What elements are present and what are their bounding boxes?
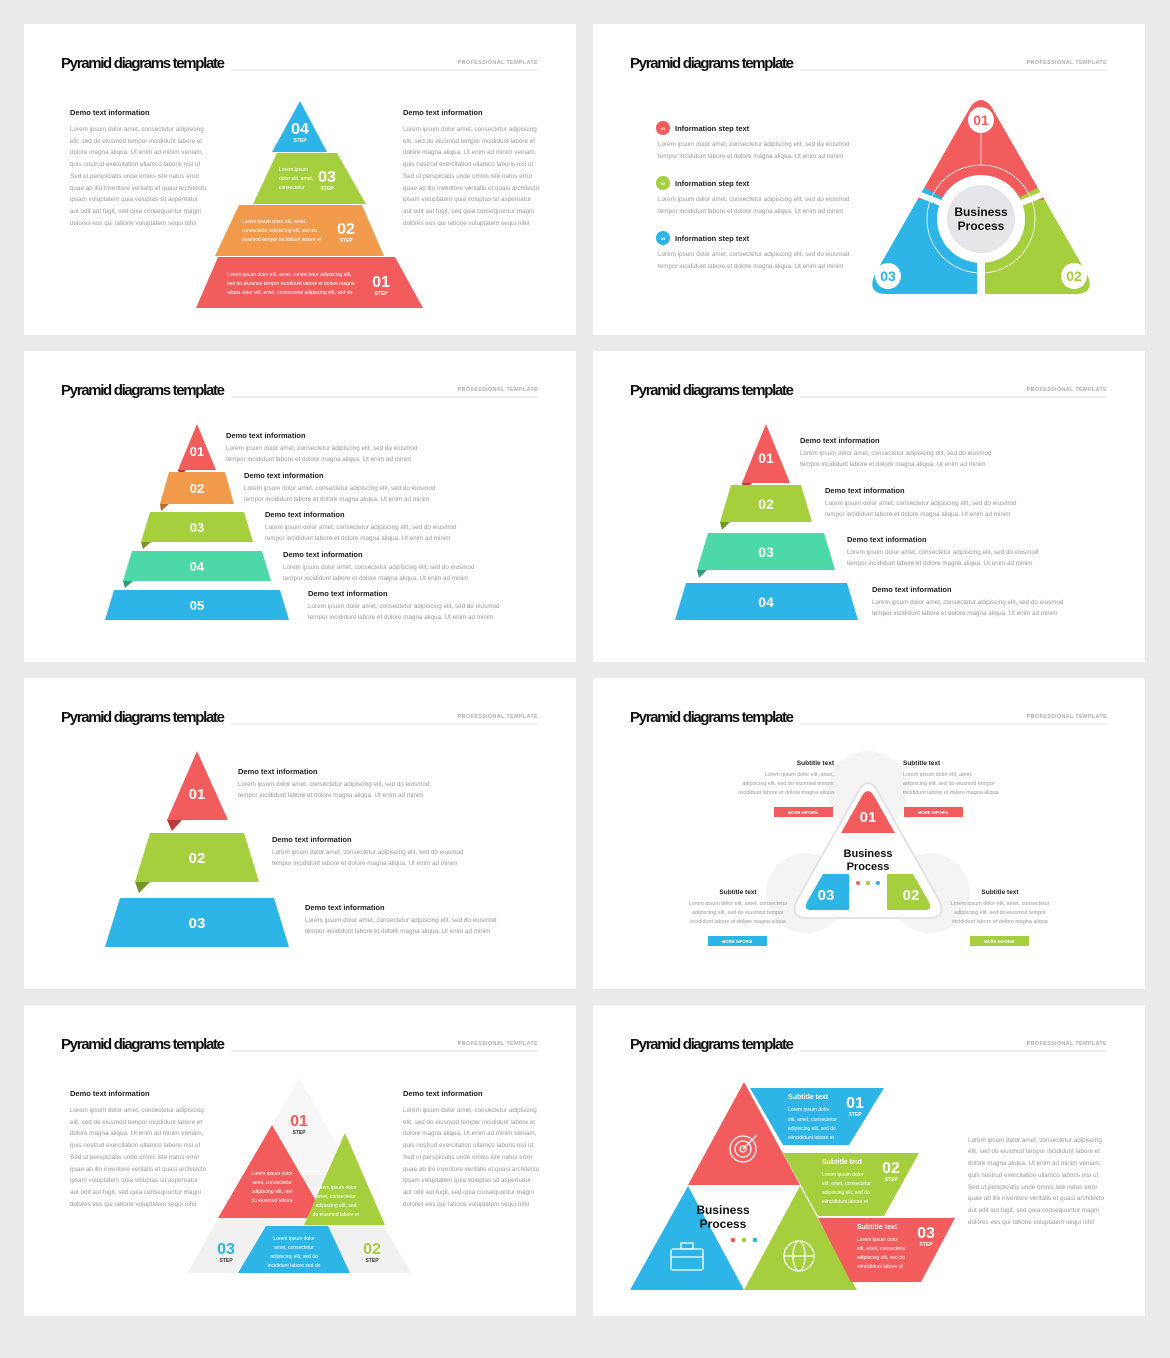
right text block: aut odit aut fugit, sed quia consequuntur magni bbox=[403, 1189, 534, 1196]
right text block: aut odit aut fugit, sed quia consequuntur magni bbox=[403, 208, 534, 215]
diagram: eiincididunt labore et bbox=[822, 1199, 868, 1205]
triangle diagram: amet, consectetur bbox=[252, 1180, 292, 1186]
header: Pyramid diagrams template bbox=[630, 382, 794, 399]
left text block: quis nostrud exercitation ullamco laboris nisi ut bbox=[70, 161, 200, 168]
callout bottom-left: Subtitle text bbox=[719, 889, 757, 896]
callout bottom-left bbox=[689, 889, 788, 946]
triangle diagram bbox=[187, 1078, 411, 1273]
right text block: dolore magna aliqua. Ut enim ad minim veniam, bbox=[403, 1130, 537, 1137]
tier labels bbox=[800, 436, 1064, 617]
slide 3: five tier pyramid bbox=[24, 351, 576, 662]
tier labels: Lorem ipsum dolor amet, consectetur adipiscing elit, sed do eiusmod bbox=[272, 849, 464, 856]
left text block: Sed ut perspiciatis unde omnis iste natus error bbox=[70, 173, 200, 180]
pyramid tiers: 01 bbox=[758, 450, 774, 466]
left text block: Demo text information bbox=[70, 108, 150, 117]
step list: Information step text bbox=[675, 234, 750, 243]
diagram: elit, amet, consectetur bbox=[822, 1181, 871, 1187]
pyramid: Lorem ipsum dolor elit, amet, consectetur adipiscing elit, bbox=[227, 272, 352, 278]
callout top-right: MORE INFORM bbox=[918, 810, 949, 815]
tier labels: Lorem ipsum dolor amet, consectetur adipiscing elit, sed do eiusmod bbox=[265, 524, 457, 531]
triangle diagram: 01 bbox=[290, 1113, 308, 1130]
triangle diagram: adipiscing elit, sed do bbox=[270, 1254, 318, 1260]
diagram bbox=[630, 1082, 955, 1290]
callout bottom-left: MORE INFORM bbox=[722, 939, 753, 944]
header: Pyramid diagrams template bbox=[630, 1036, 794, 1053]
callout top-left: adipiscing elit, sed do eiusmod tempor bbox=[742, 781, 834, 787]
pyramid: 04 bbox=[291, 121, 309, 138]
callout top-left: Lorem ipsum dolor elit, amet, bbox=[764, 772, 834, 778]
pyramid: aliqua dolor elit, amet, consectetur adipiscing elit, sed do bbox=[227, 290, 353, 296]
callout top-right: adipiscing elit, sed do eiusmod tempor bbox=[903, 781, 995, 787]
header: PROFESSIONAL TEMPLATE bbox=[458, 1041, 538, 1047]
tier labels bbox=[226, 431, 500, 621]
tier labels: tempor incididunt labore et dolore magna aliqua. Ut enim ad minim bbox=[283, 575, 469, 582]
tier labels: Demo text information bbox=[272, 835, 352, 844]
pyramid: Lorem ipsum dolor elit, amet, bbox=[242, 219, 306, 225]
pyramid: consectetur adipiscing elit, sed do bbox=[242, 228, 317, 234]
pyramid: 01 bbox=[372, 274, 390, 291]
icon: globe gear bbox=[784, 1241, 814, 1271]
right text block: Sed ut perspiciatis unde omnis iste natus error bbox=[968, 1184, 1098, 1191]
step list: Lorem ipsum dolor amet, consectetur adipiscing elit, sed do eiusmod bbox=[658, 196, 850, 203]
triangle diagram: amet, consectetur bbox=[316, 1194, 356, 1200]
right text block: dolores eos qui ratione voluptatem sequi nihil bbox=[968, 1219, 1094, 1226]
pyramid: STEP bbox=[374, 291, 388, 297]
right text block: quae ab illo inventore veritatis et quasi architecto bbox=[403, 1166, 540, 1173]
diagram: elit, amet, consectetur bbox=[788, 1117, 837, 1123]
diagram: eiincididunt labore et bbox=[857, 1264, 903, 1270]
slide 1: four step pyramid bbox=[24, 24, 576, 335]
tier labels: Demo text information bbox=[825, 486, 905, 495]
callout top-right bbox=[903, 760, 999, 817]
right text block: ipsam voluptatem quia voluptas sit aspernatur bbox=[403, 1177, 531, 1184]
slide 2: business process triangle bbox=[593, 24, 1145, 335]
header: PROFESSIONAL TEMPLATE bbox=[1027, 714, 1107, 720]
tier labels: Lorem ipsum dolor amet, consectetur adipiscing elit, sed do eiusmod bbox=[847, 549, 1039, 556]
pyramid tiers: 05 bbox=[190, 598, 204, 613]
left text block: aut odit aut fugit, sed quia consequuntur magni bbox=[70, 208, 201, 215]
diagram: 02 bbox=[882, 1160, 900, 1177]
pyramid tiers: 04 bbox=[190, 559, 205, 574]
tier labels: Demo text information bbox=[847, 535, 927, 544]
tier labels: Lorem ipsum dolor amet, consectetur adipiscing elit, sed do eiusmod bbox=[872, 599, 1064, 606]
callout bottom-right: incididunt labore et dolore magna aliqua bbox=[952, 919, 1048, 925]
header bbox=[630, 1036, 1107, 1053]
left text block: quae ab illo inventore veritatis et quasi architecto bbox=[70, 185, 207, 192]
header: PROFESSIONAL TEMPLATE bbox=[1027, 60, 1107, 66]
left text block: elit, sed do eiusmod tempor incididunt labore et bbox=[70, 1119, 202, 1126]
right text block: Sed ut perspiciatis unde omnis iste natus error bbox=[403, 173, 533, 180]
triangle diagram: STEP bbox=[292, 1130, 306, 1136]
tier labels: Lorem ipsum dolor amet, consectetur adipiscing elit, sed do eiusmod bbox=[244, 485, 436, 492]
callout top-left: Subtitle text bbox=[797, 760, 835, 767]
icon: briefcase bbox=[671, 1243, 703, 1270]
diagram: adipiscing elit, sed do bbox=[822, 1190, 870, 1196]
triangle diagram: adipiscing elit, sed bbox=[316, 1203, 357, 1209]
diagram: eiincididunt labore et bbox=[788, 1135, 834, 1141]
right text block: quis nostrud exercitation ullamco laboris nisi ut bbox=[968, 1172, 1098, 1179]
step list bbox=[656, 121, 850, 270]
tier labels: Demo text information bbox=[226, 431, 306, 440]
pyramid tiers: 03 bbox=[189, 915, 205, 932]
slide 5: three tier pyramid bbox=[24, 678, 576, 989]
callout bottom-left: Lorem ipsum dolor elit, amet, consectetur bbox=[689, 901, 788, 907]
tier labels: tempor incididunt labore et dolore magna aliqua. Ut enim ad minim bbox=[308, 614, 494, 621]
slide 8: triangles with parallelogram steps bbox=[593, 1005, 1145, 1316]
tier labels: Lorem ipsum dolor amet, consectetur adipiscing elit, sed do eiusmod bbox=[308, 603, 500, 610]
header bbox=[61, 709, 538, 726]
header: PROFESSIONAL TEMPLATE bbox=[458, 60, 538, 66]
callout top-right: Lorem ipsum dolor elit, amet, bbox=[903, 772, 973, 778]
callout top-left bbox=[738, 760, 835, 817]
header: Pyramid diagrams template bbox=[61, 382, 225, 399]
callout bottom-right: adipiscing elit, sed do eiusmod tempor bbox=[954, 910, 1046, 916]
pyramid tiers: 01 bbox=[189, 786, 205, 803]
left text block: Lorem ipsum dolor amet, consectetur adipiscing bbox=[70, 1107, 204, 1114]
diagram: Process bbox=[700, 1217, 747, 1231]
tier labels: tempor incididunt labore et dolore magna aliqua. Ut enim ad minim bbox=[825, 511, 1011, 518]
pyramid tiers: 03 bbox=[190, 520, 204, 535]
header: Pyramid diagrams template bbox=[61, 709, 225, 726]
triangle diagram: Lorem ipsum dolor bbox=[273, 1236, 315, 1242]
right text block: elit, sed do eiusmod tempor incididunt labore et bbox=[403, 138, 535, 145]
pyramid: Lorem ipsum bbox=[279, 167, 308, 173]
tier labels: Demo text information bbox=[872, 585, 952, 594]
diagram: Subtitle text bbox=[788, 1094, 829, 1101]
header: Pyramid diagrams template bbox=[630, 709, 794, 726]
pyramid tiers: 04 bbox=[758, 594, 774, 610]
left text block: elit, sed do eiusmod tempor incididunt labore et bbox=[70, 138, 202, 145]
pyramid bbox=[196, 101, 423, 308]
left text block: dolores eos qui ratione voluptatem sequi nihil bbox=[70, 1201, 196, 1208]
tier labels bbox=[238, 767, 497, 935]
tier labels: tempor incididunt labore et dolore magna aliqua. Ut enim ad minim bbox=[238, 792, 424, 799]
header: Pyramid diagrams template bbox=[61, 1036, 225, 1053]
left text block: aut odit aut fugit, sed quia consequuntur magni bbox=[70, 1189, 201, 1196]
triangle diagram: Process bbox=[958, 219, 1005, 233]
callout top-right: Subtitle text bbox=[903, 760, 941, 767]
right text block: quis nostrud exercitation ullamco laboris nisi ut bbox=[403, 1142, 533, 1149]
triangle diagram: 02 bbox=[1066, 268, 1082, 284]
triangle diagram: STEP bbox=[365, 1258, 379, 1264]
callout top-left: incididunt labore et dolore magna aliqua bbox=[738, 790, 834, 796]
header bbox=[630, 55, 1107, 72]
step list: Information step text bbox=[675, 179, 750, 188]
pyramid tiers: 03 bbox=[758, 544, 774, 560]
callout top-right: incididunt labore et dolore magna aliqua bbox=[903, 790, 999, 796]
left text block: Sed ut perspiciatis unde omnis iste natus error bbox=[70, 1154, 200, 1161]
triangle diagram: STEP bbox=[219, 1258, 233, 1264]
pyramid tiers: 02 bbox=[189, 850, 205, 867]
left text block bbox=[70, 1089, 207, 1208]
pyramid: STEP bbox=[293, 138, 307, 144]
diagram: adipiscing elit, sed do bbox=[788, 1126, 836, 1132]
header bbox=[61, 382, 538, 399]
triangle diagram: 03 bbox=[880, 268, 896, 284]
triangle diagram bbox=[872, 100, 1090, 294]
step list: Information step text bbox=[675, 124, 750, 133]
pyramid tiers: 01 bbox=[190, 444, 204, 459]
diagram: Business bbox=[844, 848, 892, 860]
header bbox=[61, 1036, 538, 1053]
right text block: dolores eos qui ratione voluptatem sequi nihil bbox=[403, 1201, 529, 1208]
diagram: 01 bbox=[846, 1095, 864, 1112]
pyramid: 03 bbox=[318, 169, 336, 186]
triangle diagram: amet, consectetur bbox=[274, 1245, 314, 1251]
right text block: dolores eos qui ratione voluptatem sequi nihil bbox=[403, 220, 529, 227]
left text block: ipsam voluptatem quia voluptas sit aspernatur bbox=[70, 196, 198, 203]
tier labels: Demo text information bbox=[283, 550, 363, 559]
right text block: Lorem ipsum dolor amet, consectetur adipiscing bbox=[403, 1107, 537, 1114]
pyramid: eiusmod tempor incididunt labore et bbox=[242, 237, 322, 243]
diagram: Lorem ipsum dolor bbox=[857, 1237, 899, 1243]
pyramid tiers bbox=[675, 424, 858, 620]
triangle diagram: incididunt labore sed do bbox=[268, 1263, 321, 1269]
diagram: Lorem ipsum dolor bbox=[822, 1172, 864, 1178]
right text block: Lorem ipsum dolor amet, consectetur adipiscing bbox=[968, 1137, 1102, 1144]
diagram: Subtitle text bbox=[822, 1159, 863, 1166]
step list: tempor incididunt labore et dolore magna aliqua. Ut enim ad minim bbox=[658, 153, 844, 160]
callout bottom-left: incididunt labore et dolore magna aliqua bbox=[690, 919, 786, 925]
right text block: ipsam voluptatem quia voluptas sit aspernatur bbox=[403, 196, 531, 203]
left text block: dolore magna aliqua. Ut enim ad minim veniam, bbox=[70, 149, 204, 156]
triangle diagram: Lorem ipsum dolor bbox=[315, 1185, 357, 1191]
tier labels: Lorem ipsum dolor amet, consectetur adipiscing elit, sed do eiusmod bbox=[305, 917, 497, 924]
header bbox=[630, 709, 1107, 726]
header: PROFESSIONAL TEMPLATE bbox=[458, 387, 538, 393]
tier labels: Lorem ipsum dolor amet, consectetur adipiscing elit, sed do eiusmod bbox=[825, 500, 1017, 507]
triangle diagram: adipiscing elit, sed bbox=[252, 1189, 293, 1195]
tier labels: tempor incididunt labore et dolore magna aliqua. Ut enim ad minim bbox=[244, 496, 430, 503]
pyramid: consectetur bbox=[279, 185, 305, 191]
callout bottom-left: adipiscing elit, sed do eiusmod tempor bbox=[692, 910, 784, 916]
left text block: Lorem ipsum dolor amet, consectetur adipiscing bbox=[70, 126, 204, 133]
right text block bbox=[403, 1089, 540, 1208]
pyramid tiers bbox=[105, 424, 289, 620]
diagram: STEP bbox=[919, 1242, 933, 1248]
left text block: quis nostrud exercitation ullamco laboris nisi ut bbox=[70, 1142, 200, 1149]
tier labels: Lorem ipsum dolor amet, consectetur adipiscing elit, sed do eiusmod bbox=[283, 564, 475, 571]
pyramid: 02 bbox=[337, 221, 355, 238]
diagram: Subtitle text bbox=[857, 1224, 898, 1231]
tier labels: tempor incididunt labore et dolore magna aliqua. Ut enim ad minim bbox=[265, 535, 451, 542]
step list: Lorem ipsum dolor amet, consectetur adipiscing elit, sed do eiusmod bbox=[658, 251, 850, 258]
tier labels: tempor incididunt labore et dolore magna aliqua. Ut enim ad minim bbox=[305, 928, 491, 935]
triangle diagram: 02 bbox=[363, 1241, 381, 1258]
triangle diagram: Business bbox=[954, 205, 1008, 219]
header bbox=[61, 55, 538, 72]
diagram: elit, amet, consectetur bbox=[857, 1246, 906, 1252]
triangle diagram: do eiusmod labore bbox=[251, 1198, 293, 1204]
slide 6: business process rounded triangle bbox=[593, 678, 1145, 989]
pyramid: STEP bbox=[320, 186, 334, 192]
tier labels: Demo text information bbox=[244, 471, 324, 480]
left text block: ipsam voluptatem quia voluptas sit aspernatur bbox=[70, 1177, 198, 1184]
step list: 01 bbox=[661, 126, 666, 131]
right text block: Demo text information bbox=[403, 108, 483, 117]
step list: Lorem ipsum dolor amet, consectetur adipiscing elit, sed do eiusmod bbox=[658, 141, 850, 148]
pyramid tiers: 02 bbox=[190, 481, 204, 496]
pyramid: sed do eiusmod tempor incididunt labore et dolore magna bbox=[227, 281, 355, 287]
tier labels: Lorem ipsum dolor amet, consectetur adipiscing elit, sed do eiusmod bbox=[800, 450, 992, 457]
left text block: dolores eos qui ratione voluptatem sequi nihil bbox=[70, 220, 196, 227]
tier labels: Demo text information bbox=[305, 903, 385, 912]
pyramid tiers bbox=[105, 751, 289, 947]
diagram: Process bbox=[847, 861, 889, 873]
triangle diagram: 03 bbox=[217, 1241, 235, 1258]
right text block bbox=[403, 108, 540, 227]
header: PROFESSIONAL TEMPLATE bbox=[458, 714, 538, 720]
pyramid: STEP bbox=[339, 238, 353, 244]
left text block bbox=[70, 108, 207, 227]
header: Pyramid diagrams template bbox=[630, 55, 794, 72]
left text block: quae ab illo inventore veritatis et quasi architecto bbox=[70, 1166, 207, 1173]
diagram: 01 bbox=[860, 809, 876, 826]
slide 4: four tier pyramid bbox=[593, 351, 1145, 662]
right text block: dolore magna aliqua. Ut enim ad minim veniam, bbox=[403, 149, 537, 156]
header: PROFESSIONAL TEMPLATE bbox=[1027, 387, 1107, 393]
callout bottom-right: Subtitle text bbox=[981, 889, 1019, 896]
slide 7: split triangle bbox=[24, 1005, 576, 1316]
right text block: dolore magna aliqua. Ut enim ad minim veniam, bbox=[968, 1160, 1102, 1167]
tier labels: tempor incididunt labore et dolore magna aliqua. Ut enim ad minim bbox=[847, 560, 1033, 567]
step list: tempor incididunt labore et dolore magna aliqua. Ut enim ad minim bbox=[658, 208, 844, 215]
left text block: Demo text information bbox=[70, 1089, 150, 1098]
step list: tempor incididunt labore et dolore magna aliqua. Ut enim ad minim bbox=[658, 263, 844, 270]
triangle diagram: 01 bbox=[973, 112, 989, 128]
diagram: 03 bbox=[917, 1225, 935, 1242]
right text block: elit, sed do eiusmod tempor incididunt labore et bbox=[403, 1119, 535, 1126]
diagram: 02 bbox=[903, 887, 919, 904]
tier labels: tempor incididunt labore et dolore magna aliqua. Ut enim ad minim bbox=[800, 461, 986, 468]
callout top-left: MORE INFORM bbox=[788, 810, 819, 815]
diagram: STEP bbox=[884, 1177, 898, 1183]
right text block: quis nostrud exercitation ullamco laboris nisi ut bbox=[403, 161, 533, 168]
tier labels: tempor incididunt labore et dolore magna aliqua. Ut enim ad minim bbox=[272, 860, 458, 867]
triangle diagram: Lorem ipsum dolor bbox=[251, 1171, 293, 1177]
diagram: Lorem ipsum dolor bbox=[788, 1107, 830, 1113]
right text block: quae ab illo inventore veritatis et quasi architecto bbox=[968, 1195, 1105, 1202]
tier labels: Lorem ipsum dolor amet, consectetur adipiscing elit, sed do eiusmod bbox=[226, 445, 418, 452]
right text block: Sed ut perspiciatis unde omnis iste natus error bbox=[403, 1154, 533, 1161]
tier labels: Lorem ipsum dolor amet, consectetur adipiscing elit, sed do eiusmod bbox=[238, 781, 430, 788]
right text block: elit, sed do eiusmod tempor incididunt labore et bbox=[968, 1148, 1100, 1155]
header: PROFESSIONAL TEMPLATE bbox=[1027, 1041, 1107, 1047]
diagram bbox=[766, 751, 970, 933]
right text block: Lorem ipsum dolor amet, consectetur adipiscing bbox=[403, 126, 537, 133]
diagram: 03 bbox=[818, 887, 834, 904]
icon: target bbox=[730, 1135, 757, 1162]
tier labels: tempor incididunt labore et dolore magna aliqua. Ut enim ad minim bbox=[226, 456, 412, 463]
diagram: adipiscing elit, sed do bbox=[857, 1255, 905, 1261]
diagram: Business bbox=[696, 1203, 750, 1217]
header: Pyramid diagrams template bbox=[61, 55, 225, 72]
triangle diagram: do eiusmod labore et bbox=[313, 1212, 360, 1218]
step list: 02 bbox=[661, 181, 666, 186]
left text block: dolore magna aliqua. Ut enim ad minim veniam, bbox=[70, 1130, 204, 1137]
callout bottom-right: MORE INFORM bbox=[984, 939, 1015, 944]
diagram: STEP bbox=[848, 1112, 862, 1118]
callout bottom-right: Lorem ipsum dolor elit, amet, consectetur bbox=[951, 901, 1050, 907]
header bbox=[630, 382, 1107, 399]
pyramid: dolor elit, amet, bbox=[279, 176, 313, 182]
right text block bbox=[968, 1137, 1105, 1226]
step list: 03 bbox=[661, 236, 666, 241]
right text block: Demo text information bbox=[403, 1089, 483, 1098]
right text block: quae ab illo inventore veritatis et quasi architecto bbox=[403, 185, 540, 192]
tier labels: Demo text information bbox=[265, 510, 345, 519]
pyramid tiers: 02 bbox=[758, 496, 774, 512]
tier labels: Demo text information bbox=[800, 436, 880, 445]
right text block: aut odit aut fugit, sed quia consequuntur magni bbox=[968, 1207, 1099, 1214]
tier labels: Demo text information bbox=[238, 767, 318, 776]
tier labels: Demo text information bbox=[308, 589, 388, 598]
callout bottom-right bbox=[951, 889, 1050, 946]
tier labels: tempor incididunt labore et dolore magna aliqua. Ut enim ad minim bbox=[872, 610, 1058, 617]
